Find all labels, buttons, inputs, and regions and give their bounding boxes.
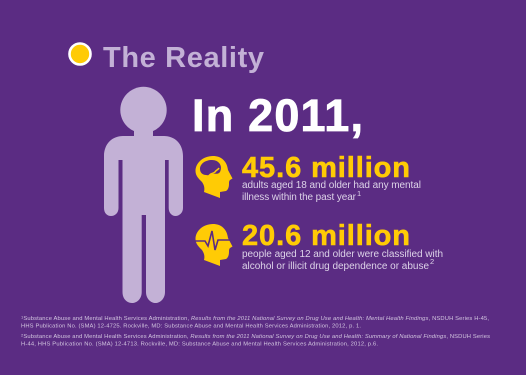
stat: 45.6 million: 45.6 million [242, 152, 410, 184]
footnote 1 [21, 314, 489, 330]
footnote 1: 1 [21, 314, 24, 320]
description: mental illness: adults aged 18 and older had any mental [242, 180, 421, 191]
footnote 2 [21, 332, 490, 348]
icon: head with pulse line [195, 224, 233, 266]
headline: In 2011,: In 2011, [192, 90, 363, 141]
footnote 2: Results from the 2011 National Survey on Drug Use and Health: Summary of National Findings, NSDUH Series [190, 334, 490, 340]
icon: yellow bullet [70, 44, 90, 64]
stat: 20.6 million: 20.6 million [242, 220, 410, 252]
description: mental illness [242, 180, 421, 203]
description: mental illness: 1 [357, 189, 361, 198]
description: mental illness: illness within the past year [242, 192, 357, 203]
footnote 1: Results from the 2011 National Survey on Drug Use and Health: Mental Health Findings, NSDUH Series H-45, [191, 316, 489, 322]
heading: The Reality: The Reality [103, 42, 264, 74]
icon: person figure [104, 87, 183, 303]
description: substance use: people aged 12 and older were classified with [242, 249, 443, 260]
footnote 2: 2 [21, 332, 24, 338]
footnote 2: Substance Abuse and Mental Health Services Administration, [23, 334, 190, 340]
description: substance use: 2 [430, 257, 434, 266]
footnote 1: Substance Abuse and Mental Health Services Administration, [23, 316, 191, 322]
footnote 1: HHS Publication No. (SMA) 12-4725. Rockville, MD: Substance Abuse and Mental Health Services Administration, 2012, p. 1. [21, 324, 361, 330]
icon: head with brain [196, 156, 232, 198]
description: substance use: alcohol or illicit drug dependence or abuse [242, 261, 429, 272]
footnote 2: H-44, HHS Publication No. (SMA) 12-4713. Rockville, MD: Substance Abuse and Mental Health Services Administration, 2012, p.6. [21, 342, 378, 348]
description: substance use [242, 249, 443, 272]
